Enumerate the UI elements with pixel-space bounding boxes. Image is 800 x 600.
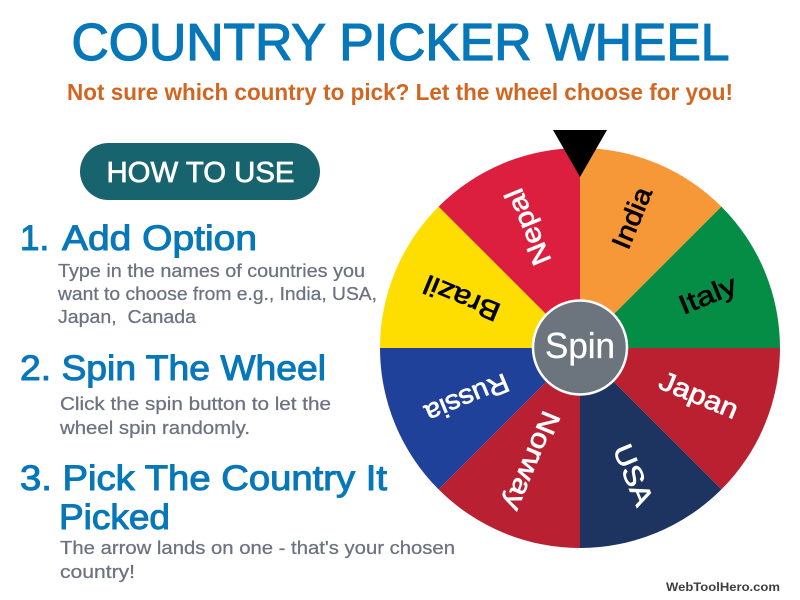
label: USA: USA bbox=[607, 440, 659, 510]
label: India: India bbox=[606, 182, 659, 253]
segment: Japan bbox=[580, 348, 780, 489]
label: Brazil: Brazil bbox=[419, 269, 505, 327]
segment: Russia bbox=[380, 348, 580, 489]
step 3: Picked bbox=[59, 498, 170, 537]
step 2 bbox=[20, 349, 331, 438]
pointer arrow bbox=[553, 130, 607, 177]
step 1: Add Option bbox=[62, 219, 257, 258]
step 1 bbox=[20, 219, 377, 327]
how to use badge bbox=[80, 143, 320, 200]
segment: Norway bbox=[439, 348, 580, 548]
step 1: want to choose from e.g., India, USA, bbox=[57, 284, 377, 304]
step 3: The arrow lands on one - that's your chosen bbox=[60, 538, 455, 558]
segment: USA bbox=[580, 348, 721, 548]
title: COUNTRY PICKER WHEEL bbox=[72, 14, 730, 72]
step 1: Japan, Canada bbox=[58, 307, 197, 327]
brand credit: WebToolHero.com bbox=[666, 580, 780, 594]
label: Italy: Italy bbox=[674, 270, 742, 320]
label: Nepal: Nepal bbox=[499, 184, 557, 270]
how to use badge: HOW TO USE bbox=[106, 157, 294, 189]
segment: India bbox=[580, 148, 721, 348]
label: Russia: Russia bbox=[420, 367, 513, 429]
segment: Nepal bbox=[439, 148, 580, 348]
step 2: wheel spin randomly. bbox=[59, 418, 250, 438]
label: Norway: Norway bbox=[498, 407, 566, 516]
segment: Italy bbox=[580, 207, 780, 348]
step 2: Click the spin button to let the bbox=[60, 394, 331, 414]
segment: Brazil bbox=[380, 207, 580, 348]
step 2: 2. Spin The Wheel bbox=[20, 349, 326, 388]
step 3: country! bbox=[60, 562, 135, 582]
picker wheel bbox=[380, 148, 780, 548]
step 1: Type in the names of countries you bbox=[58, 261, 365, 281]
step 3: 3. Pick The Country It bbox=[20, 459, 387, 498]
spin button: Spin bbox=[545, 325, 615, 366]
step 3 bbox=[20, 459, 455, 582]
spin button bbox=[533, 300, 627, 394]
label: Japan: Japan bbox=[655, 365, 743, 425]
step 1: 1. bbox=[20, 219, 49, 258]
subtitle: Not sure which country to pick? Let the wheel choose for you! bbox=[67, 79, 733, 105]
